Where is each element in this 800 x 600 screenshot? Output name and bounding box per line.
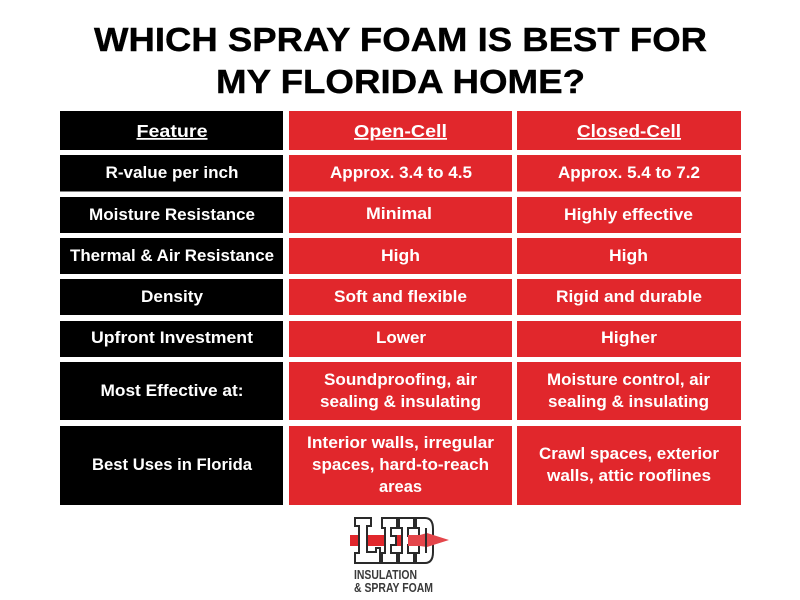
row: Most Effective at: sealing & insulating <box>548 393 709 411</box>
row: R-value per inch: Approx. 5.4 to 7.2 <box>558 164 700 182</box>
row: Most Effective at: Soundproofing, air <box>324 371 478 389</box>
row: Best Uses in Florida: Crawl spaces, exterior <box>539 445 720 463</box>
logo tagline: INSULATION <box>354 568 417 582</box>
icon: spray band behind letters <box>350 535 410 546</box>
title <box>94 22 707 101</box>
row: Density <box>60 279 741 315</box>
row: Upfront Investment: Lower <box>376 329 427 347</box>
row: Most Effective at <box>60 362 741 420</box>
row: Best Uses in Florida: spaces, hard-to-reach <box>312 456 489 474</box>
row: Most Effective at: Most Effective at: <box>100 382 244 400</box>
row: Most Effective at: Moisture control, air <box>547 371 711 389</box>
row: Most Effective at: sealing & insulating <box>320 393 481 411</box>
row: Density: Soft and flexible <box>334 288 467 306</box>
row: Best Uses in Florida: walls, attic rooflines <box>546 467 711 485</box>
logo tagline: & SPRAY FOAM <box>354 581 433 595</box>
row: Best Uses in Florida <box>60 426 741 505</box>
header row <box>60 111 741 150</box>
row: Best Uses in Florida: Interior walls, irregular <box>307 434 495 452</box>
row: R-value per inch: R-value per inch <box>106 164 238 182</box>
row: Upfront Investment: Upfront Investment <box>91 329 254 347</box>
row: Moisture Resistance: Highly effective <box>564 206 693 224</box>
row: Best Uses in Florida: Best Uses in Florida <box>92 456 253 474</box>
header row: Open-Cell <box>354 121 447 141</box>
row: Upfront Investment: Higher <box>601 329 658 347</box>
row: R-value per inch <box>60 155 741 192</box>
row: Thermal & Air Resistance: Thermal & Air Resistance <box>70 247 274 265</box>
row: Thermal & Air Resistance: High <box>609 247 648 265</box>
row: Moisture Resistance: Minimal <box>366 205 432 223</box>
row: Moisture Resistance: Moisture Resistance <box>89 206 255 224</box>
row: Best Uses in Florida: areas <box>379 478 422 496</box>
logo tagline <box>354 568 433 595</box>
logo detail: D slot <box>425 528 427 553</box>
row: Upfront Investment <box>60 321 741 357</box>
row: Density: Rigid and durable <box>556 288 702 306</box>
header row: Closed-Cell <box>577 121 681 141</box>
title: WHICH SPRAY FOAM IS BEST FOR <box>94 22 707 59</box>
logo: LEED Insulation & Spray Foam <box>350 518 449 595</box>
row: Moisture Resistance <box>60 197 741 233</box>
icon: spray cone arrow <box>408 533 449 547</box>
row: R-value per inch: Approx. 3.4 to 4.5 <box>330 164 472 182</box>
row: Thermal & Air Resistance: High <box>381 247 420 265</box>
logo letters LEED <box>355 518 433 563</box>
row: Density: Density <box>141 288 204 306</box>
header row: Feature <box>136 121 208 141</box>
row: Thermal & Air Resistance <box>60 238 741 274</box>
title: MY FLORIDA HOME? <box>216 64 585 101</box>
comparison table <box>60 111 741 505</box>
